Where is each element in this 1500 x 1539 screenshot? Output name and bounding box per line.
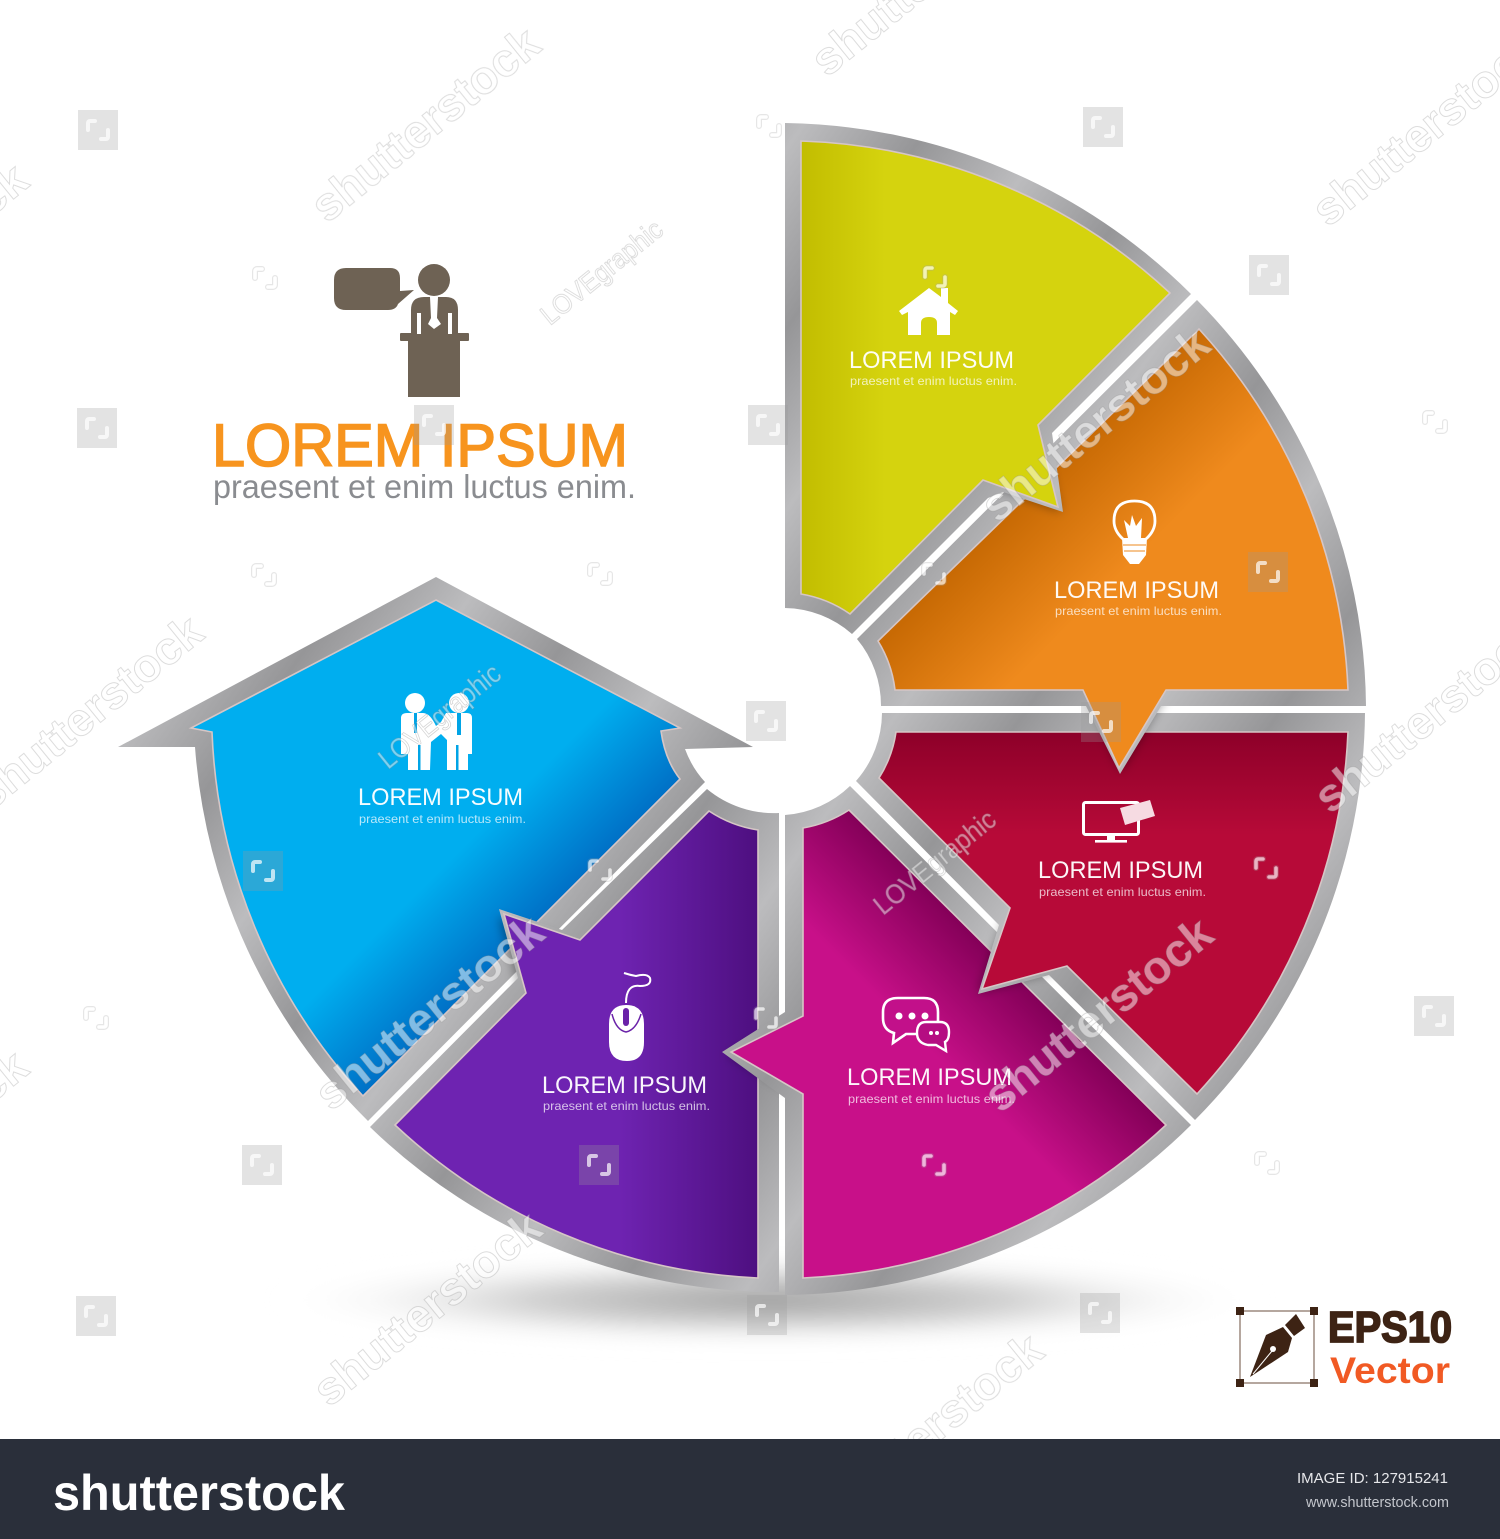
orange heading: LOREM IPSUM	[1054, 577, 1219, 604]
segment: magenta	[722, 786, 1191, 1295]
image id: IMAGE ID: 127915241	[1297, 1470, 1448, 1487]
watermark wordmarks: LOVEgraphic	[534, 213, 669, 331]
subtitle: praesent et enim luctus enim.	[213, 468, 636, 505]
arrow shadow: purple tip	[499, 917, 575, 996]
purple icon: computer mouse	[609, 973, 650, 1061]
watermark brackets without squares	[86, 117, 1445, 1174]
crimson icon: monitor with envelope	[1084, 800, 1155, 843]
footer logo: shutterstock	[53, 1465, 345, 1521]
watermark wordmarks: shutterstock	[971, 316, 1220, 532]
watermark wordmarks: shutterstock	[974, 906, 1223, 1122]
segment: orange	[857, 300, 1366, 774]
segment: blue arrow	[118, 577, 753, 1121]
yellow icon: house	[899, 288, 958, 335]
icon: pen nib in selection box	[1236, 1307, 1318, 1387]
purple caption: praesent et enim luctus enim.	[543, 1099, 710, 1113]
watermark squares	[76, 107, 1454, 1336]
watermark wordmarks: shutterstock	[305, 904, 554, 1120]
blue caption: praesent et enim luctus enim.	[359, 812, 526, 826]
Vector label: Vector	[1330, 1350, 1450, 1391]
magenta heading: LOREM IPSUM	[847, 1064, 1012, 1091]
watermark wordmarks: LOVEgraphic	[867, 803, 1002, 921]
footer bar	[0, 1439, 1500, 1539]
yellow caption: praesent et enim luctus enim.	[850, 374, 1017, 388]
blue icon: two people shaking hands	[401, 693, 472, 770]
EPS10 label: EPS10	[1328, 1303, 1452, 1352]
segment: purple	[370, 789, 779, 1292]
arrow shadow: red tip	[978, 912, 1063, 993]
purple heading: LOREM IPSUM	[542, 1072, 707, 1099]
orange icon: light bulb	[1114, 501, 1155, 564]
magenta icon: chat bubbles	[883, 998, 949, 1051]
ground shadow under the wheel	[270, 1254, 1270, 1346]
icon: speaker at lectern	[334, 264, 469, 397]
watermark wordmarks: LOVEgraphic	[372, 657, 507, 775]
crimson caption: praesent et enim luctus enim.	[1039, 885, 1206, 899]
segment: crimson	[856, 713, 1365, 1120]
magenta caption: praesent et enim luctus enim.	[848, 1092, 1015, 1106]
arrow shadow: orange tip	[1085, 694, 1168, 772]
watermark wordmarks: shutterstock	[301, 16, 550, 232]
arrow shadow: yellow tip	[986, 430, 1061, 512]
watermark wordmarks: shutterstock	[804, 1322, 1053, 1538]
title: LOREM IPSUM	[212, 412, 628, 479]
orange caption: praesent et enim luctus enim.	[1055, 604, 1222, 618]
watermark wordmarks: shutterstock	[303, 1200, 552, 1416]
blue heading: LOREM IPSUM	[358, 784, 523, 811]
watermark brackets in squares	[86, 118, 1444, 1325]
segment: yellow	[785, 123, 1191, 634]
crimson heading: LOREM IPSUM	[1038, 857, 1203, 884]
footer url: www.shutterstock.com	[1305, 1494, 1449, 1511]
yellow heading: LOREM IPSUM	[849, 347, 1014, 374]
badge: EPS10 Vector	[1236, 1303, 1452, 1391]
arrow shadow: magenta tip	[727, 1019, 799, 1097]
